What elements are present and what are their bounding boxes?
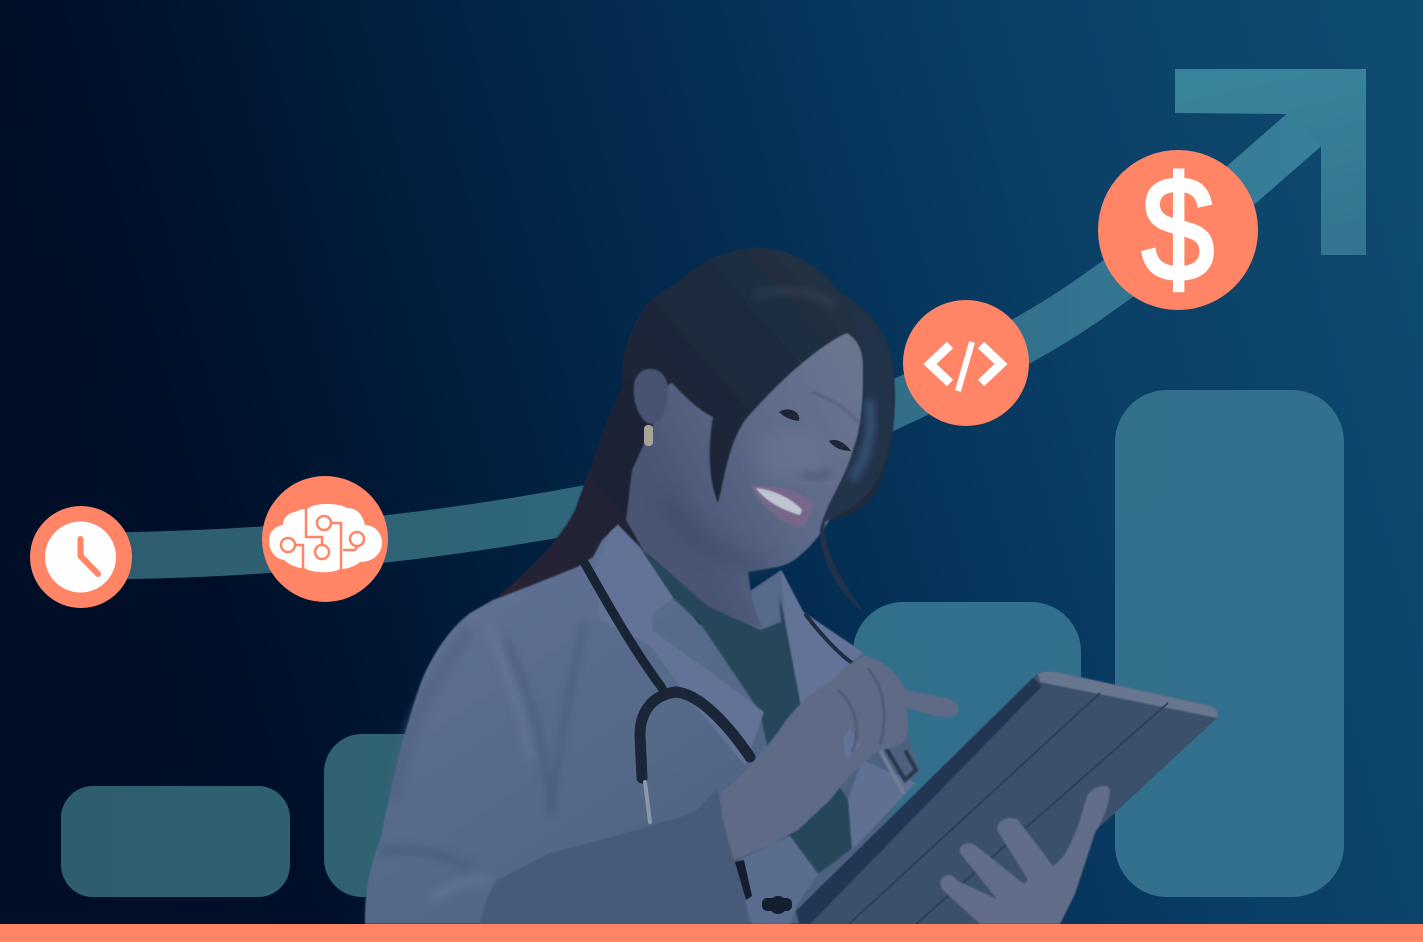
doctor photo [365, 248, 1218, 924]
eyes [779, 409, 851, 451]
side hair strand [820, 308, 894, 613]
ear [634, 369, 668, 424]
shirt [640, 548, 854, 874]
icon: dollar: $ [1142, 146, 1214, 312]
coat lapel [595, 525, 764, 765]
front hair sweep [623, 266, 849, 503]
hair sheen [755, 290, 835, 305]
hair highlight [852, 400, 871, 480]
back hair [497, 248, 895, 597]
coat shoulder shading [395, 630, 470, 800]
right coat panel [848, 760, 916, 850]
tablet [796, 671, 1218, 924]
earring [644, 425, 653, 446]
bar chart [61, 390, 1344, 897]
coat [365, 525, 920, 924]
icon: AI brain [262, 476, 388, 602]
sleeve [480, 790, 748, 924]
pointing hand [720, 656, 958, 860]
jaw shading [665, 500, 765, 566]
coat folds [380, 622, 585, 900]
smile [751, 486, 813, 527]
holding hand [940, 786, 1110, 924]
icon: clock [30, 506, 132, 608]
stethoscope [584, 562, 916, 822]
coat placket and button [735, 860, 792, 914]
finger shading [838, 668, 884, 752]
cheek highlight [756, 431, 824, 479]
nose shadow [803, 468, 829, 478]
finger gap [843, 728, 860, 760]
icon: dollar [1098, 146, 1258, 312]
right lapel [781, 570, 862, 720]
growth arrow [80, 69, 1366, 556]
neck and face [626, 333, 863, 628]
bottom accent stripe [0, 924, 1423, 942]
icon: code brackets [903, 300, 1029, 426]
brow shading [812, 392, 860, 424]
lower coat panel [735, 836, 818, 924]
